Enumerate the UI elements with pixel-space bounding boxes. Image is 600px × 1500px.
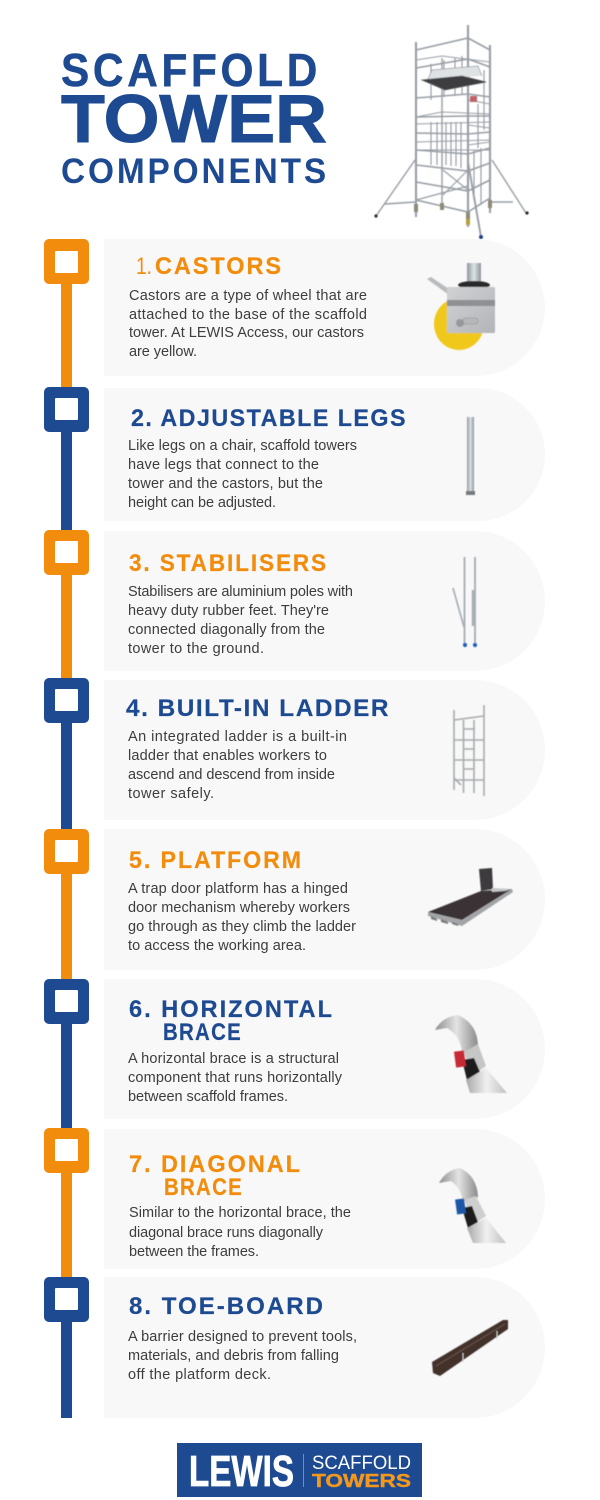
text: platform description: door mechanism whereby workers [128, 900, 350, 916]
text: diagonal brace description: Similar to the horizontal brace, the [129, 1205, 351, 1221]
text: adjustable legs description [128, 438, 357, 511]
title: COMPONENTS [61, 152, 329, 191]
timeline marker 1 with stem [44, 239, 89, 390]
title: TOWER [61, 81, 327, 157]
text: castors description: Castors are a type of wheel that are [129, 288, 367, 304]
panel: adjustable legs [104, 388, 545, 521]
heading: horizontal brace: 6. HORIZONTAL [129, 996, 334, 1023]
heading: toe-board: 8. TOE-BOARD [129, 1293, 325, 1320]
timeline marker 2 with stem [44, 387, 89, 533]
text: stabilisers description: heavy duty rubber feet. They're [128, 603, 329, 619]
text: castors description: tower. At LEWIS Access, our castors [129, 325, 364, 341]
icon: ladder frame [454, 705, 484, 796]
icon: scaffold tower [374, 25, 529, 239]
heading: built-in ladder: 4. BUILT-IN LADDER [126, 695, 390, 722]
text: castors description [129, 288, 367, 360]
logo: TOWERS [312, 1471, 411, 1491]
icon: castor wheel [427, 263, 495, 350]
icon: adjustable leg [466, 417, 475, 495]
panel: castors [104, 239, 545, 376]
text: adjustable legs description: have legs that connect to the [128, 457, 319, 473]
timeline marker 8 with stem [44, 1277, 89, 1418]
text: horizontal brace description: component that runs horizontally [128, 1070, 343, 1086]
heading: horizontal brace: BRACE [163, 1019, 242, 1046]
text: platform description: to access the working area. [128, 938, 306, 954]
text: built-in ladder description: tower safely. [128, 786, 214, 802]
logo: SCAFFOLD [312, 1453, 411, 1474]
text: castors description: are yellow. [129, 344, 197, 360]
text: built-in ladder description: ladder that enables workers to [128, 748, 327, 764]
heading: platform: 5. PLATFORM [129, 847, 303, 874]
icon: diagonal brace hook [439, 1168, 506, 1243]
heading: castors: 1. [136, 253, 152, 280]
heading: stabilisers: 3. STABILISERS [129, 550, 328, 577]
text: built-in ladder description: ascend and descend from inside [128, 767, 335, 783]
text: castors description: attached to the base of the scaffold [129, 307, 367, 323]
panel: stabilisers [104, 531, 545, 671]
text: platform description: A trap door platform has a hinged [128, 881, 348, 897]
icon: horizontal brace hook [435, 1015, 507, 1093]
text: stabilisers description [128, 584, 353, 657]
panel: diagonal brace [104, 1129, 545, 1269]
text: platform description [128, 881, 356, 954]
text: diagonal brace description: between the frames. [129, 1244, 259, 1260]
heading: horizontal brace [129, 996, 334, 1046]
text: adjustable legs description: Like legs on a chair, scaffold towers [128, 438, 357, 454]
text: diagonal brace description [129, 1205, 351, 1260]
heading: adjustable legs: 2. ADJUSTABLE LEGS [131, 405, 407, 432]
text: toe-board description: materials, and debris from falling [128, 1348, 339, 1364]
heading: diagonal brace: BRACE [164, 1174, 243, 1201]
title: SCAFFOLD [61, 44, 321, 96]
text: built-in ladder description [128, 729, 347, 802]
panel: toe-board [104, 1277, 545, 1418]
text: stabilisers description: Stabilisers are aluminium poles with [128, 584, 353, 600]
panel: horizontal brace [104, 979, 545, 1119]
heading: diagonal brace [129, 1151, 302, 1201]
text: adjustable legs description: tower and the castors, but the [128, 476, 323, 492]
text: stabilisers description: tower to the ground. [128, 641, 264, 657]
heading: diagonal brace: 7. DIAGONAL [129, 1151, 302, 1178]
timeline marker 6 with stem [44, 979, 89, 1131]
logo [177, 1443, 422, 1497]
panel: platform [104, 829, 545, 970]
text: platform description: go through as they climb the ladder [128, 919, 356, 935]
text: horizontal brace description [128, 1051, 343, 1105]
heading: castors: CASTORS [155, 253, 283, 280]
timeline marker 3 with stem [44, 530, 89, 681]
text: adjustable legs description: height can be adjusted. [128, 495, 276, 511]
text: horizontal brace description: between scaffold frames. [128, 1089, 288, 1105]
logo: LEWIS [189, 1447, 294, 1496]
timeline marker 7 with stem [44, 1128, 89, 1280]
timeline marker 4 with stem [44, 678, 89, 832]
text: stabilisers description: connected diagonally from the [128, 622, 325, 638]
panel: built-in ladder [104, 680, 545, 820]
title [61, 44, 329, 191]
timeline marker 5 with stem [44, 829, 89, 982]
text: toe-board description: A barrier designed to prevent tools, [128, 1329, 357, 1345]
text: horizontal brace description: A horizontal brace is a structural [128, 1051, 339, 1067]
icon: toe-board [432, 1320, 508, 1376]
icon: stabilisers [453, 557, 477, 647]
text: toe-board description: off the platform deck. [128, 1367, 271, 1383]
text: diagonal brace description: diagonal brace runs diagonally [129, 1225, 324, 1241]
text: built-in ladder description: An integrated ladder is a built-in [128, 729, 347, 745]
text: toe-board description [128, 1329, 357, 1383]
icon: platform [428, 868, 513, 926]
